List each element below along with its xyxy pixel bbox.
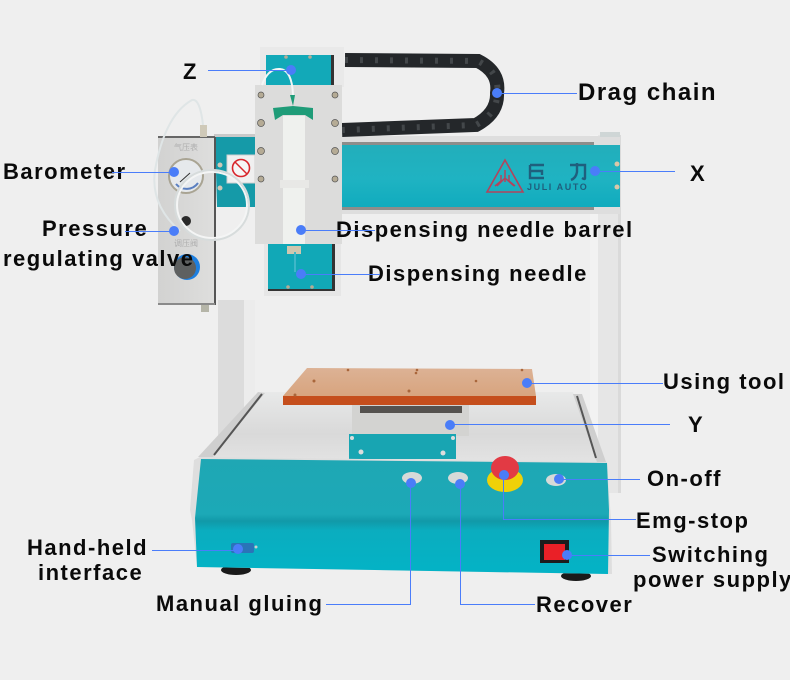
emergency stop: [487, 456, 523, 492]
callout: Using tool: [522, 369, 786, 394]
callout: Hand-held interface: [27, 535, 243, 585]
callout: X: [590, 161, 706, 186]
pressure control box: [158, 136, 216, 312]
plate screws: [258, 92, 338, 182]
callout: Recover: [455, 479, 633, 617]
callout: Switching power supply: [562, 542, 790, 592]
buttons: [402, 472, 422, 484]
right upright column: [590, 135, 621, 493]
base tray: [198, 392, 606, 462]
drag chain: [342, 60, 497, 130]
serial port: [231, 543, 258, 553]
callout: Z: [183, 59, 296, 84]
callout: Manual gluing: Manual gluing: [156, 591, 323, 616]
callout: Using tool: Using tool: [663, 369, 786, 394]
syringe barrel: [273, 95, 313, 272]
callout: Emg-stop: Emg-stop: [636, 508, 749, 533]
Z axis carriage: [255, 47, 344, 296]
callout: Dispensing needle: Dispensing needle: [368, 261, 588, 286]
callout: Pressure regulating valve: regulating valve: [3, 246, 195, 271]
power switch: [540, 540, 569, 563]
callout: On-off: On-off: [647, 466, 722, 491]
callout: Hand-held interface: interface: [38, 560, 143, 585]
callout: Z: Z: [183, 59, 198, 84]
callout: X: X: [690, 161, 706, 186]
callout: Manual gluing: [156, 478, 416, 616]
callout: Dispensing needle barrel: Dispensing needle barrel: [336, 217, 634, 242]
callout: Y: [445, 412, 704, 437]
callout: Switching power supply: power supply: [633, 567, 790, 592]
machine illustration: [154, 47, 621, 581]
left upright column: [218, 300, 255, 450]
logo: JULI AUTO: JULI AUTO: [527, 182, 588, 192]
base feet: [221, 565, 591, 581]
barometer gauge: [169, 159, 203, 193]
callout: Y: Y: [688, 412, 704, 437]
callout: Hand-held interface: Hand-held: [27, 535, 148, 560]
callout: Switching power supply: Switching: [652, 542, 769, 567]
callout: Emg-stop: [499, 470, 749, 533]
X axis beam: [342, 132, 620, 214]
pressure valve knob: [174, 254, 200, 280]
callout: Pressure regulating valve: [3, 216, 195, 271]
callout: On-off: [554, 466, 722, 491]
front panel: [190, 456, 612, 574]
air tubing: [154, 100, 249, 240]
callout: Drag chain: [492, 79, 717, 106]
callout: Recover: Recover: [536, 592, 633, 617]
callout: Drag chain: Drag chain: [578, 79, 717, 106]
rear teal bracket with warning sign: [214, 134, 256, 207]
Y axis slider: [349, 405, 469, 459]
callout: Pressure regulating valve: Pressure: [42, 216, 148, 241]
tooling plate: [283, 368, 536, 405]
logo: JULI AUTO: [487, 160, 588, 192]
pressure control box: 调压阀: [174, 238, 198, 249]
pressure control box: 气压表: [174, 142, 198, 153]
callout: Barometer: Barometer: [3, 159, 127, 184]
